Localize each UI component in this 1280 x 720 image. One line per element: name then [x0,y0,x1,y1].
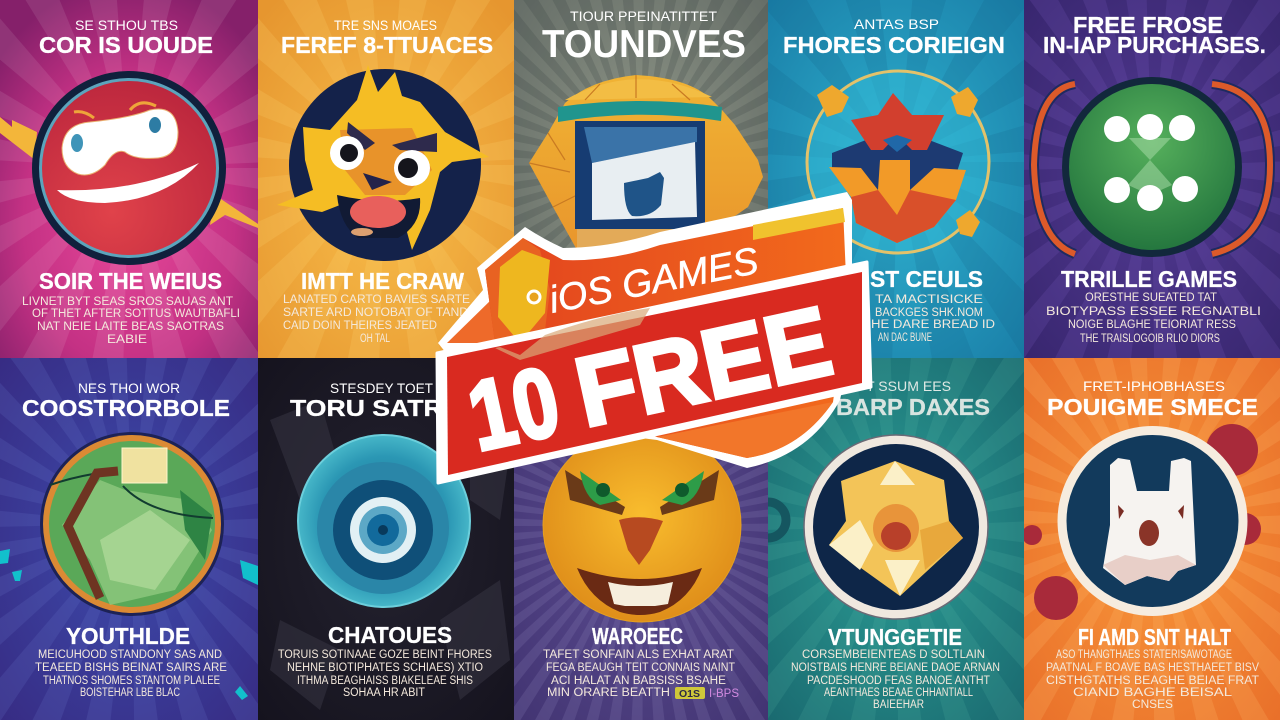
heading [1047,379,1258,420]
body text [871,294,995,344]
body text: LANATED CARTO BAVIES SARTE [283,294,470,306]
body text: TAFET SONFAIN ALS EXHAT ARAT [543,649,734,661]
icon: gold star [804,435,988,619]
body text: PACDESHOOD FEAS BANOE ANTHT [807,675,990,687]
heading: POUIGME SMECE [1047,394,1258,420]
heading: COR IS UOUDE [39,32,213,58]
body text: TEAEED BISHS BEINAT SAIRS ARE [35,662,227,674]
body text [1046,292,1261,345]
body text: TA MACTISICKE [875,294,983,306]
icon: crystal crown [807,71,989,253]
callout: yellow chip: I-BPS [709,688,739,700]
heading [40,20,212,54]
icon: red ball face [32,71,226,265]
body text: EABIE [107,334,147,346]
body text: NAT NEIE LAITE BEAS SAOTRAS [37,321,224,333]
body text: OF THET AFTER SOTTUS WAUTBAFLI [32,308,240,320]
heading [282,20,492,54]
heading: TIOUR PPEINATITTET [570,9,717,24]
banner: 10 free ribbon [437,192,871,483]
label: VTUNGGETIE [828,624,962,650]
label: CHATOUES [328,622,452,648]
body text: AEANTHAES BEAAE CHHANTIALL [824,687,973,699]
body text: ASO THANGTHAES STATERISAWOTAGE [1056,649,1232,661]
icon: blue disk [298,435,470,607]
heading: T SSUM EES [866,379,951,394]
body text: OH TAL [360,333,390,345]
label: TRRILLE GAMES [1061,266,1237,292]
body text: LIVNET BYT SEAS SROS SAUAS ANT [22,296,233,308]
heading: FRET-IPHOBHASES [1083,379,1225,394]
icon: green planet [40,432,224,616]
body text: BOISTEHAR LBE BLAC [80,687,180,699]
icon: white rabbit badge [1022,424,1261,620]
body text [283,294,470,345]
icon: teal confetti [0,549,258,700]
callout: yellow chip [675,687,739,700]
body text: ITHMA BEAGHAISS BIAKELEAE SHIS [297,675,473,687]
label: IMTT HE CRAW [301,268,464,294]
body text [278,649,492,699]
body text: PAATNAL F BOAVE BAS HESTHAEET BISV [1046,662,1259,674]
body text: MIN ORARE BEATTH [547,687,670,699]
heading: IN-IAP PURCHASES. [1043,32,1266,58]
body text: NOIGE BLAGHE TEIORIAT RESS [1068,319,1236,331]
label: FI AMD SNT HALT [1078,624,1231,650]
body text: CNSES [1132,699,1173,711]
heading [542,12,744,58]
body text: BAIEEHAR [873,699,924,711]
heading: STESDEY TOET [330,381,433,396]
icon: angry orange face [543,428,741,622]
icon: lightning [0,117,258,228]
label: ST CEULS [870,266,983,292]
label: SOIR THE WEIUS [39,268,222,294]
banner back: ios games ribbon [438,192,855,468]
heading: BARP DAXES [836,394,990,420]
panel: top 2 yellow [258,0,514,358]
body text: AN DAC BUNE [878,332,932,344]
body text: BIOTYPASS ESSEE REGNATBLI [1046,306,1261,318]
panel: bottom 3 purple-grey [514,438,768,720]
icon: shield one [485,238,550,355]
heading: COOSTRORBOLE [22,395,230,421]
body text: ACI HALAT AN BABSISS BSAHE [551,675,726,687]
body text: CAID DOIN THEIRES JEATED [283,320,437,332]
icon: monitor case [529,75,763,250]
heading: FEREF 8-TTUACES [281,32,493,58]
heading: NES THOI WOR [78,381,180,396]
label: WAROEEC [592,623,683,649]
body text: CIAND BAGHE BEISAL [1073,687,1233,699]
heading [22,384,230,416]
body text: SOHAA HR ABIT [343,687,425,699]
body text [1046,649,1259,711]
body text: TORUIS SOTINAAE GOZE BEINT FHORES [278,649,492,661]
panel: top 1 magenta [0,0,258,358]
ios games text: iOS GAMES [546,240,762,322]
icon: green button [1034,77,1270,257]
heading: TRE SNS MOAES [334,18,437,33]
panel: top 3 grey [514,0,768,248]
banner front: 10 free: FREE [566,285,841,448]
heading: FREE FROSE [1073,12,1223,38]
heading [1044,16,1265,54]
body text [35,649,227,699]
body text: SARTE ARD NOTOBAT OF TAND [283,307,468,319]
callout: yellow chip: O1S [679,688,700,700]
panel: bottom 1 indigo [0,358,258,720]
body text: BACKGES SHK.NOM [875,307,983,319]
panel: top 4 blue [768,0,1024,358]
banner front: 10 free [437,262,871,483]
body text: CORSEMBEIENTEAS D SOLTLAIN [802,649,985,661]
panel: bottom 2 dark [258,358,514,720]
heading [290,384,436,416]
body text: ORESTHE SUEATED TAT [1085,292,1217,304]
panel: top 5 purple [1024,0,1280,358]
body text: NEHNE BIOTIPHATES SCHIAES) XTIO [287,662,483,674]
heading: TORU SATRD [290,395,462,421]
heading: FHORES CORIEIGN [783,32,1005,58]
heading [836,379,990,420]
icon: yellow beast [277,65,489,261]
body text [22,296,240,346]
body text: THE TRAISLOGOIB RLIO DIORS [1080,333,1220,345]
body text: FEGA BEAUGH TEIT CONNAIS NAINT [546,662,735,674]
body text: MEICUHOOD STANDONY SAS AND [38,649,222,661]
body text [543,649,735,699]
body text: HE DARE BREAD ID [871,319,995,331]
heading: ANTAS BSP [854,17,939,32]
heading: TOUNDVES [542,23,746,66]
label: YOUTHLDE [66,623,190,649]
panel: bottom 5 orange [1022,358,1280,720]
body text [791,649,1000,711]
body text: NOISTBAIS HENRE BEIANE DAOE ARNAN [791,662,1000,674]
heading [784,20,1004,54]
body text: THATNOS SHOMES STANTOM PLALEE [43,675,220,687]
body text: CISTHGTATHS BEAGHE BEIAE FRAT [1046,675,1259,687]
heading: SE STHOU TBS [75,18,178,33]
banner front: 10 free: 10 [459,345,568,472]
panel: bottom 4 teal [750,358,1024,720]
